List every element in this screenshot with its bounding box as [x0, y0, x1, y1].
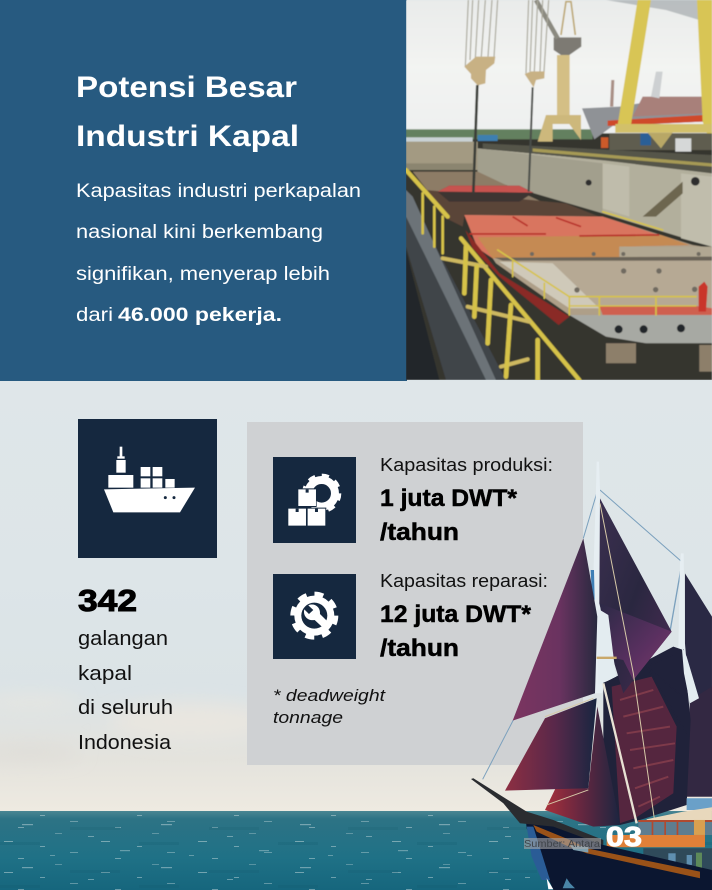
capacity: production: 1 juta DWT* — [380, 485, 518, 512]
stat: shipyards: di seluruh — [78, 697, 173, 719]
panel: headline — [0, 0, 407, 381]
ship behind — [582, 103, 703, 140]
yellow railings — [406, 170, 696, 380]
intro text: dari — [76, 305, 113, 326]
masts — [593, 462, 617, 693]
tan crane — [557, 55, 570, 117]
background: sky and sea — [0, 381, 712, 890]
footnote: tonnage — [273, 708, 343, 727]
sails — [685, 573, 712, 797]
intro text: 46.000 pekerja. — [118, 305, 282, 326]
stat: shipyards: Indonesia — [78, 732, 172, 754]
icon: boxes and gear — [273, 457, 356, 543]
hoist cables — [465, 0, 549, 73]
capacity: repair: 12 juta DWT* — [380, 601, 532, 628]
stat: shipyards: kapal — [78, 663, 132, 685]
yellow gantry — [618, 0, 651, 125]
stat: shipyards — [78, 583, 173, 754]
icon: wrench and gear — [273, 574, 356, 659]
photo: shipyard dry dock — [406, 0, 712, 380]
barge — [464, 215, 712, 315]
title: Potensi Besar — [76, 71, 297, 104]
stat: shipyards: 342 — [78, 583, 137, 618]
capacity: repair: /tahun — [380, 635, 459, 662]
icon box: cargo ship — [78, 419, 217, 558]
black beam — [406, 218, 506, 380]
capacity: production: /tahun — [380, 519, 459, 546]
source credit: Sumber: Antara — [524, 839, 600, 850]
title: Industri Kapal — [76, 120, 299, 153]
capacity: production — [380, 455, 553, 546]
intro text: signifikan, menyerap lebih — [76, 264, 330, 285]
hull — [525, 812, 712, 890]
title — [76, 71, 299, 153]
intro text: nasional kini berkembang — [76, 222, 323, 243]
sailing ship — [471, 462, 712, 890]
cabin — [607, 798, 712, 870]
rigging — [483, 490, 682, 779]
capacity: production: Kapasitas produksi: — [380, 455, 553, 475]
footnote — [273, 686, 386, 727]
icon: cargo ship — [104, 447, 195, 512]
intro text: Kapasitas industri perkapalan — [76, 181, 361, 202]
capacity: repair: Kapasitas reparasi: — [380, 571, 548, 591]
intro text — [76, 181, 361, 326]
hull and cabin — [471, 778, 712, 890]
footnote: * deadweight — [273, 686, 386, 705]
panel: capacity — [247, 422, 583, 765]
stat: shipyards: galangan — [78, 628, 168, 650]
capacity: repair — [380, 571, 548, 662]
page number: 03 — [606, 821, 642, 852]
